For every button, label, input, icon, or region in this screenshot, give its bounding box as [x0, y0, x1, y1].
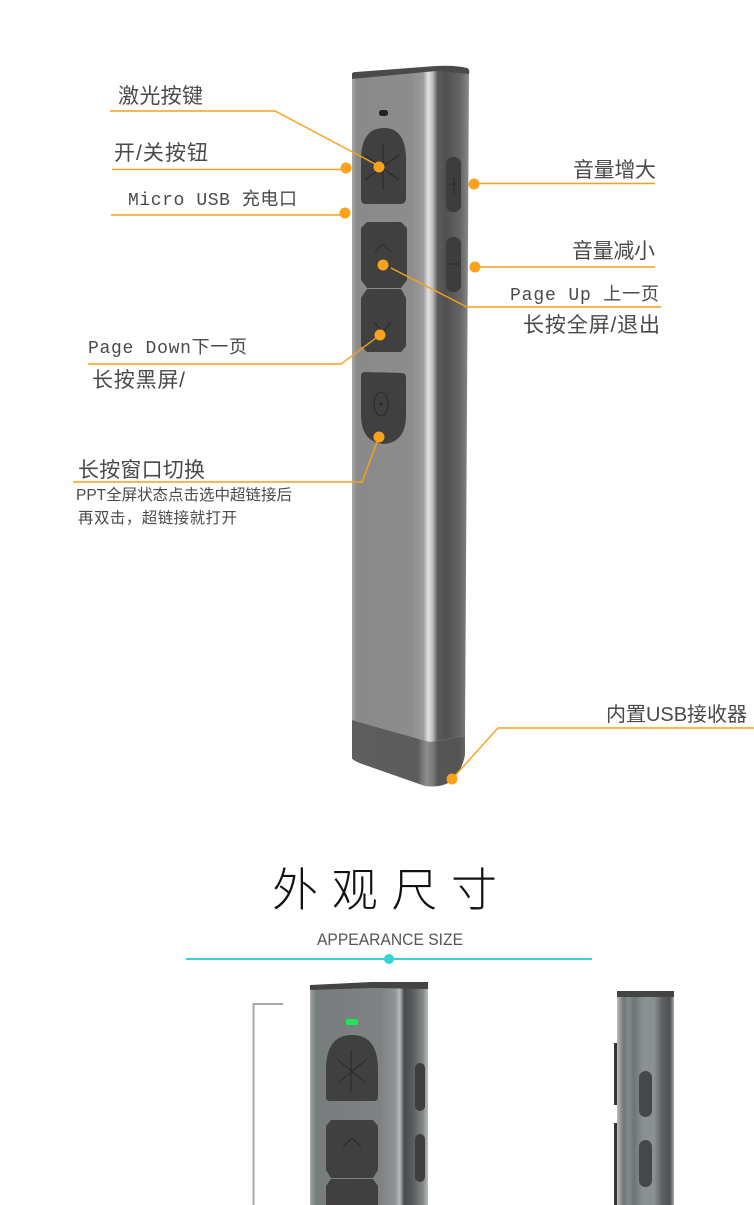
label: usb receiver: 内置USB接收器	[606, 703, 747, 726]
front power button	[326, 1035, 378, 1101]
front page up button	[326, 1120, 378, 1178]
button: page down	[361, 289, 406, 352]
label: usb receiver	[446, 703, 754, 784]
label: laser key: 激光按键	[118, 85, 203, 108]
side pills	[639, 1071, 652, 1187]
label: micro usb	[111, 189, 350, 218]
button: window switch	[361, 372, 406, 444]
label: power switch	[112, 142, 352, 174]
label: window switch: PPT全屏状态点击选中超链接后	[76, 486, 292, 504]
label: window switch	[73, 432, 384, 527]
button: volume up	[446, 157, 461, 212]
green led	[346, 1019, 358, 1025]
label: laser key	[110, 85, 384, 172]
label: volume up	[468, 159, 656, 190]
side top cap	[617, 991, 674, 997]
label: page up: 长按全屏/退出	[523, 314, 660, 337]
label: window switch: 再双击，超链接就打开	[78, 509, 237, 527]
label: micro usb: Micro USB 充电口	[128, 189, 297, 211]
title: 外观尺寸	[272, 864, 497, 916]
label: volume down	[470, 240, 655, 272]
button: volume down	[446, 237, 461, 292]
dimension bracket	[254, 1004, 283, 1205]
device top cap	[352, 66, 469, 79]
divider: teal with dot	[186, 954, 592, 964]
label: page down: 长按黑屏/	[92, 369, 185, 392]
subtitle: APPEARANCE SIZE	[317, 930, 463, 949]
side buttons	[614, 1043, 617, 1205]
device bottom cap	[352, 720, 465, 786]
button: page up	[361, 222, 407, 288]
label: page down	[88, 330, 386, 392]
front page down button	[326, 1179, 378, 1205]
device: front view	[310, 982, 428, 1205]
label: volume down: 音量减小	[572, 240, 655, 263]
label: page down: Page Down下一页	[88, 338, 247, 359]
device: main presenter	[352, 66, 469, 786]
button: laser	[361, 128, 406, 204]
label: window switch: 长按窗口切换	[78, 459, 205, 482]
label: page up: Page Up 上一页	[510, 284, 659, 306]
front volume buttons	[415, 1063, 425, 1182]
label: power switch: 开/关按钮	[114, 142, 208, 165]
device: side view	[614, 991, 674, 1205]
label: page up	[378, 260, 661, 337]
front top cap	[310, 982, 428, 990]
label: volume up: 音量增大	[573, 159, 656, 182]
indicator hole	[379, 110, 388, 116]
